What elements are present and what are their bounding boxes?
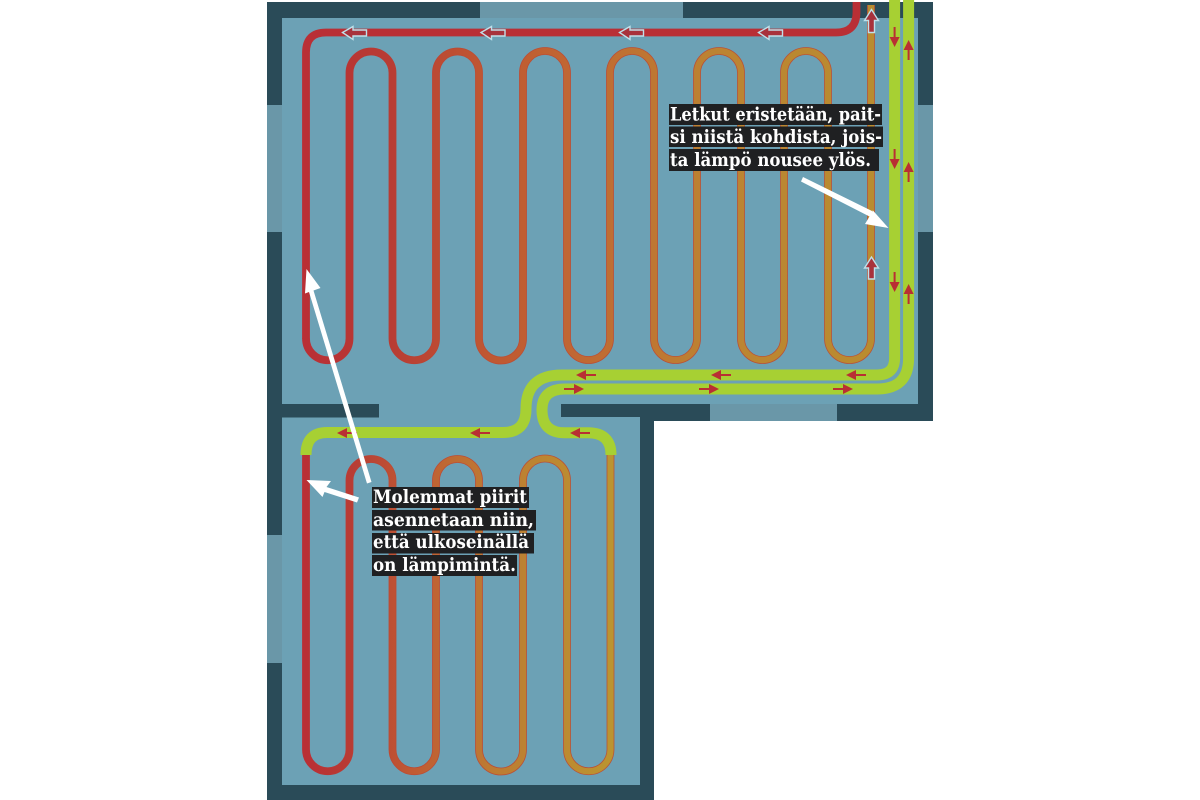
callout: outer wall: että ulkoseinällä [373,532,529,553]
white arrow to left wall pipe lower [306,480,359,502]
hollow flow arrows on red pipes [342,10,878,279]
room floor [267,2,933,800]
callout: insulation [669,104,883,171]
red supply pipe [306,2,856,339]
building floor plan [267,2,933,800]
arrows pointing right [564,384,853,394]
upper circuit pipe [306,2,871,360]
callout: insulation: si niistä kohdista, jois- [670,127,882,148]
hollow arrows pointing left [342,26,782,40]
lower circuit pipe [306,454,610,772]
arrows pointing down [890,27,900,292]
walls [267,2,933,800]
callout: insulation: Letkut eristetään, pait- [670,105,881,126]
callout: insulation: ta lämpö nousee ylös. [670,150,871,171]
callout: outer wall: Molemmat piirit [373,487,527,508]
red flow arrows on green pipes [337,27,914,438]
hollow arrows pointing up [864,10,878,279]
white arrow to green pipe [801,177,888,228]
arrows pointing left [337,370,866,438]
green insulated feed pipes [306,0,909,455]
windows [267,2,933,663]
callout: outer wall: on lämpimintä. [373,555,516,576]
white arrow to left wall pipe upper [305,269,372,484]
callout: outer wall: asennetaan niin, [373,510,534,531]
arrows pointing up [904,40,914,304]
callout: outer wall [372,487,536,576]
